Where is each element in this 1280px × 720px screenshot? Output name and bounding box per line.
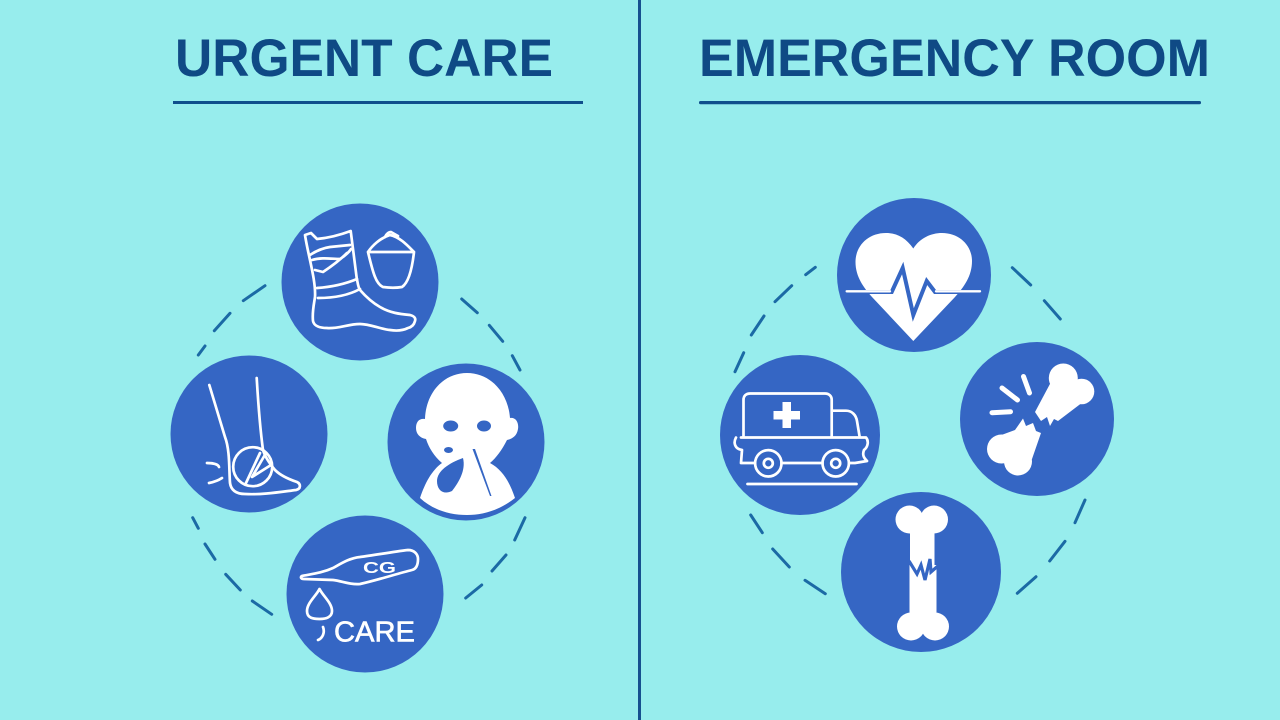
dashed ring: emergency room [735,267,1085,594]
icon: thermometer, drop and care label [286,516,444,672]
heading: emergency room: EMERGENCY ROOM [699,29,1210,88]
icon: fractured bone [841,492,1001,652]
heading: urgent care: URGENT CARE [175,29,553,88]
icon: heart with pulse [837,198,991,352]
icon: ambulance [720,355,880,515]
center divider [638,0,641,720]
icon: thermometer, drop and care label: CARE [334,616,415,648]
panel: emergency room [699,29,1210,652]
icon: broken bone [960,342,1114,496]
panel: urgent care [170,29,583,672]
icon: bandaged foot and bucket [282,204,438,360]
heading underline [173,101,583,104]
icon: child with runny nose [388,364,544,520]
heading underline [699,101,1201,104]
icon: thermometer, drop and care label: CG [363,560,396,577]
icon: injured ankle [170,356,328,512]
dashed ring: urgent care [193,286,525,614]
